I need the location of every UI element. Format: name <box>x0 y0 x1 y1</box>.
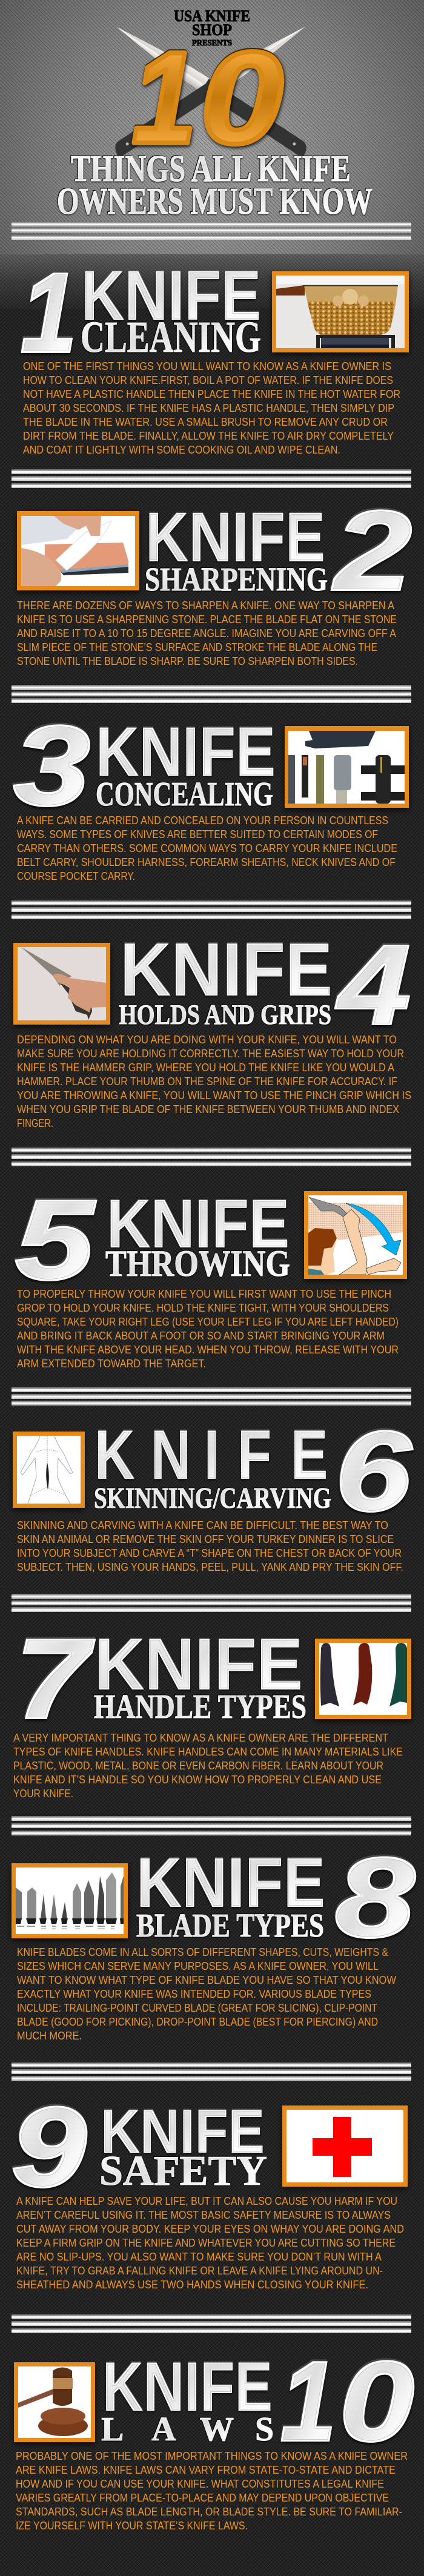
body text: DEPENDING ON WHAT YOU ARE DOING WITH YOUR KNIFE, YOU WILL WANT TO <box>17 1034 397 1046</box>
body text: THE BLADE IN THE WATER. USE A SMALL BRUSH TO REMOVE ANY CRUD OR <box>23 416 388 428</box>
panel: 2 knife sharpening <box>17 487 412 667</box>
subheading: safety: SAFETY <box>99 2148 267 2195</box>
body text: AREN’T CAREFUL USING IT. THE MOST BASIC SAFETY MEASURE IS TO ALWAYS <box>16 2209 391 2221</box>
heading: knife: KNIFE <box>94 1623 303 1705</box>
subheading: laws: LAWS <box>101 2411 274 2448</box>
panel: 9 knife safety <box>11 2084 408 2291</box>
body text <box>17 814 397 882</box>
image: knife handles <box>315 1639 411 1719</box>
heading: knife: KNIFE <box>145 498 325 576</box>
body text: ARM EXTENDED TOWARD THE TARGET. <box>17 1358 206 1370</box>
image: sheaths and holsters <box>285 726 409 808</box>
heading: knife: KNIFE <box>136 1843 325 1922</box>
number 1: 1 <box>21 249 77 376</box>
subheading: throwing: THROWING <box>105 1244 290 1284</box>
number 10 in gold: 1 <box>132 24 196 171</box>
panel: 6 knife skinning and carving <box>13 1408 412 1573</box>
heading: knife: KNIFE <box>94 1416 328 1494</box>
body text: SIZES WHICH CAN SERVE MANY PURPOSES. AS A KNIFE OWNER, YOU WILL <box>17 1960 379 1972</box>
number 10 in gold <box>132 24 283 171</box>
presenter: USA Knife Shop presents: USA KNIFE <box>174 7 250 25</box>
body text: A VERY IMPORTANT THING TO KNOW AS A KNIFE OWNER ARE THE DIFFERENT <box>13 1732 388 1744</box>
number 10: 0 <box>339 2338 414 2465</box>
header <box>57 7 373 222</box>
heading: knife: KNIFE <box>81 256 261 335</box>
presenter: USA Knife Shop presents <box>174 7 250 48</box>
body text: SKINNING AND CARVING WITH A KNIFE CAN BE DIFFICULT. THE BEST WAY TO <box>17 1519 388 1531</box>
body text <box>16 2195 404 2291</box>
body text: WANT TO KNOW WHAT TYPE OF KNIFE BLADE YOU HAVE SO THAT YOU KNOW <box>17 1974 396 1986</box>
presenter: USA Knife Shop presents: PRESENTS <box>192 39 232 48</box>
number 3: 3 <box>13 702 90 829</box>
number 10 <box>280 2338 414 2465</box>
number 6: 6 <box>335 1408 412 1534</box>
number 2: 2 <box>332 487 412 614</box>
subheading: concealing: CONCEALING <box>96 776 273 813</box>
heading: knife: KNIFE <box>96 713 276 791</box>
body text: EXACTLY WHAT YOUR KNIFE WAS INTENDED FOR. VARIOUS BLADE TYPES <box>17 1988 371 2000</box>
number 7: 7 <box>15 1616 94 1742</box>
body text: SHEATHED AND ALWAYS USE TWO HANDS WHEN CLOSING YOUR KNIFE. <box>16 2279 368 2291</box>
panel: 1 knife cleaning <box>21 249 409 456</box>
image: red cross <box>282 2105 408 2187</box>
subheading: cleaning: CLEANING <box>81 312 261 362</box>
body text: MUCH MORE. <box>17 2030 82 2042</box>
panel: 4 knife holds and grips <box>13 922 411 1129</box>
image: boiling pot <box>272 271 409 352</box>
body text: IZE YOURSELF WITH YOUR STATE’S KNIFE LAWS. <box>16 2520 248 2532</box>
subheading: holds and grips: HOLDS AND GRIPS <box>119 999 331 1031</box>
heading: knife: KNIFE <box>101 2097 265 2166</box>
body text <box>16 2450 408 2532</box>
body text: SLIM PIECE OF THE STONE’S SURFACE AND STROKE THE BLADE ALONG THE <box>17 641 377 653</box>
icon: crossed knives <box>111 20 311 159</box>
heading: knife: KNIFE <box>107 1186 290 1262</box>
body text: TO PROPERLY THROW YOUR KNIFE YOU WILL FIRST WANT TO USE THE PINCH <box>17 1288 391 1300</box>
subheading: sharpening: SHARPENING <box>145 561 328 598</box>
body text: BLADE (GOOD FOR PICKING), DROP-POINT BLADE (BEST FOR PIERCING) AND <box>17 2016 378 2028</box>
image: sharpening stone <box>17 511 139 590</box>
body text: KNIFE, TRY TO GRAB A FALLING KNIFE OR LEAVE A KNIFE LYING AROUND UN- <box>16 2265 383 2277</box>
number 8: 8 <box>335 1834 415 1961</box>
image: gavel <box>14 2362 95 2442</box>
body text: PLASTIC, WOOD, METAL, BONE OR EVEN CARBON FIBER. LEARN ABOUT YOUR <box>13 1760 383 1772</box>
number 9: 9 <box>11 2084 87 2210</box>
title: things all knife owners must know <box>57 148 373 222</box>
subheading: blade types: BLADE TYPES <box>136 1907 324 1944</box>
number 10: 1 <box>280 2338 336 2465</box>
body text <box>17 1288 399 1370</box>
body text: YOUR KNIFE. <box>13 1788 73 1800</box>
heading: knife: KNIFE <box>102 2348 273 2426</box>
body text: STONE UNTIL THE BLADE IS SHARP. BE SURE TO SHARPEN BOTH SIDES. <box>17 655 358 667</box>
body text <box>17 1946 396 2042</box>
body text: VARIES GREATLY FROM PLACE-TO-PLACE AND MAY DEPEND UPON OBJECTIVE <box>16 2492 389 2504</box>
image: knife throwing illustration <box>304 1191 407 1279</box>
body text <box>13 1732 403 1800</box>
heading: knife: KNIFE <box>120 928 333 1012</box>
title: things all knife owners must know: THINGS ALL KNIFE <box>71 148 351 190</box>
body text: ONE OF THE FIRST THINGS YOU WILL WANT TO KNOW AS A KNIFE OWNER IS <box>23 360 391 372</box>
body text: AND COAT IT LIGHTLY WITH SOME COOKING OIL AND WIPE CLEAN. <box>23 444 340 456</box>
body text: AND BRING IT BACK ABOUT A FOOT OR SO AND START BRINGING YOUR ARM <box>17 1330 385 1342</box>
body text: INCLUDE: TRAILING-POINT CURVED BLADE (GREAT FOR SLICING), CLIP-POINT <box>17 2002 377 2014</box>
body text: ARE NO SLIP-UPS. YOU ALSO WANT TO MAKE SURE YOU DON’T RUN WITH A <box>16 2251 382 2263</box>
body text: HOW AND IF YOU CAN USE YOUR KNIFE. WHAT CONSTITUTES A LEGAL KNIFE <box>16 2478 384 2490</box>
body text: KNIFE AND IT’S HANDLE SO YOU KNOW HOW TO PROPERLY CLEAN AND USE <box>13 1774 382 1786</box>
body text: COURSE POCKET CARRY. <box>17 870 135 882</box>
presenter: USA Knife Shop presents: SHOP <box>192 21 232 39</box>
subheading: skinning/carving: SKINNING/CARVING <box>94 1481 331 1514</box>
body text <box>17 599 397 667</box>
panel: 7 knife handle types <box>13 1616 411 1800</box>
panel: 8 knife blade types <box>12 1834 415 2042</box>
body text <box>17 1034 411 1129</box>
body text: THERE ARE DOZENS OF WAYS TO SHARPEN A KNIFE. ONE WAY TO SHARPEN A <box>17 599 394 612</box>
image: hand gripping knife <box>13 943 110 1025</box>
image: skinning diagram <box>13 1432 85 1508</box>
number 4: 4 <box>335 922 411 1048</box>
body text: FINGER. <box>17 1117 53 1129</box>
panel: 3 knife concealing <box>13 702 409 882</box>
subheading: handle types: HANDLE TYPES <box>94 1688 306 1726</box>
panel: 5 knife throwing <box>15 1177 407 1370</box>
panel: 10 knife laws <box>14 2338 414 2532</box>
image: blade types chart <box>12 1863 128 1938</box>
body text: WAYS. SOME TYPES OF KNIVES ARE BETTER SUITED TO CERTAIN MODES OF <box>17 828 378 841</box>
body text <box>23 360 400 456</box>
number 5: 5 <box>15 1177 96 1303</box>
number 10 in gold: 0 <box>200 24 283 171</box>
body text <box>17 1519 403 1573</box>
